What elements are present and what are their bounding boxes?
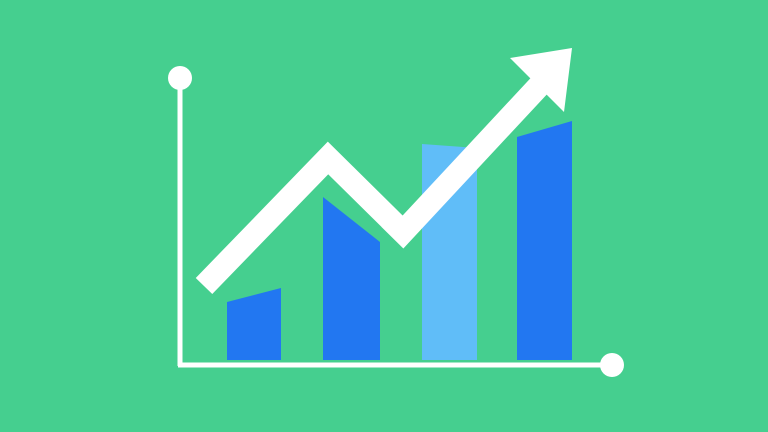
trend arrow xyxy=(204,48,572,286)
bar 2 xyxy=(323,197,380,360)
axes xyxy=(168,66,624,377)
bar 1 xyxy=(227,288,281,360)
bars xyxy=(227,121,572,360)
bar 3 light xyxy=(422,144,477,360)
bar 4 xyxy=(517,121,572,360)
